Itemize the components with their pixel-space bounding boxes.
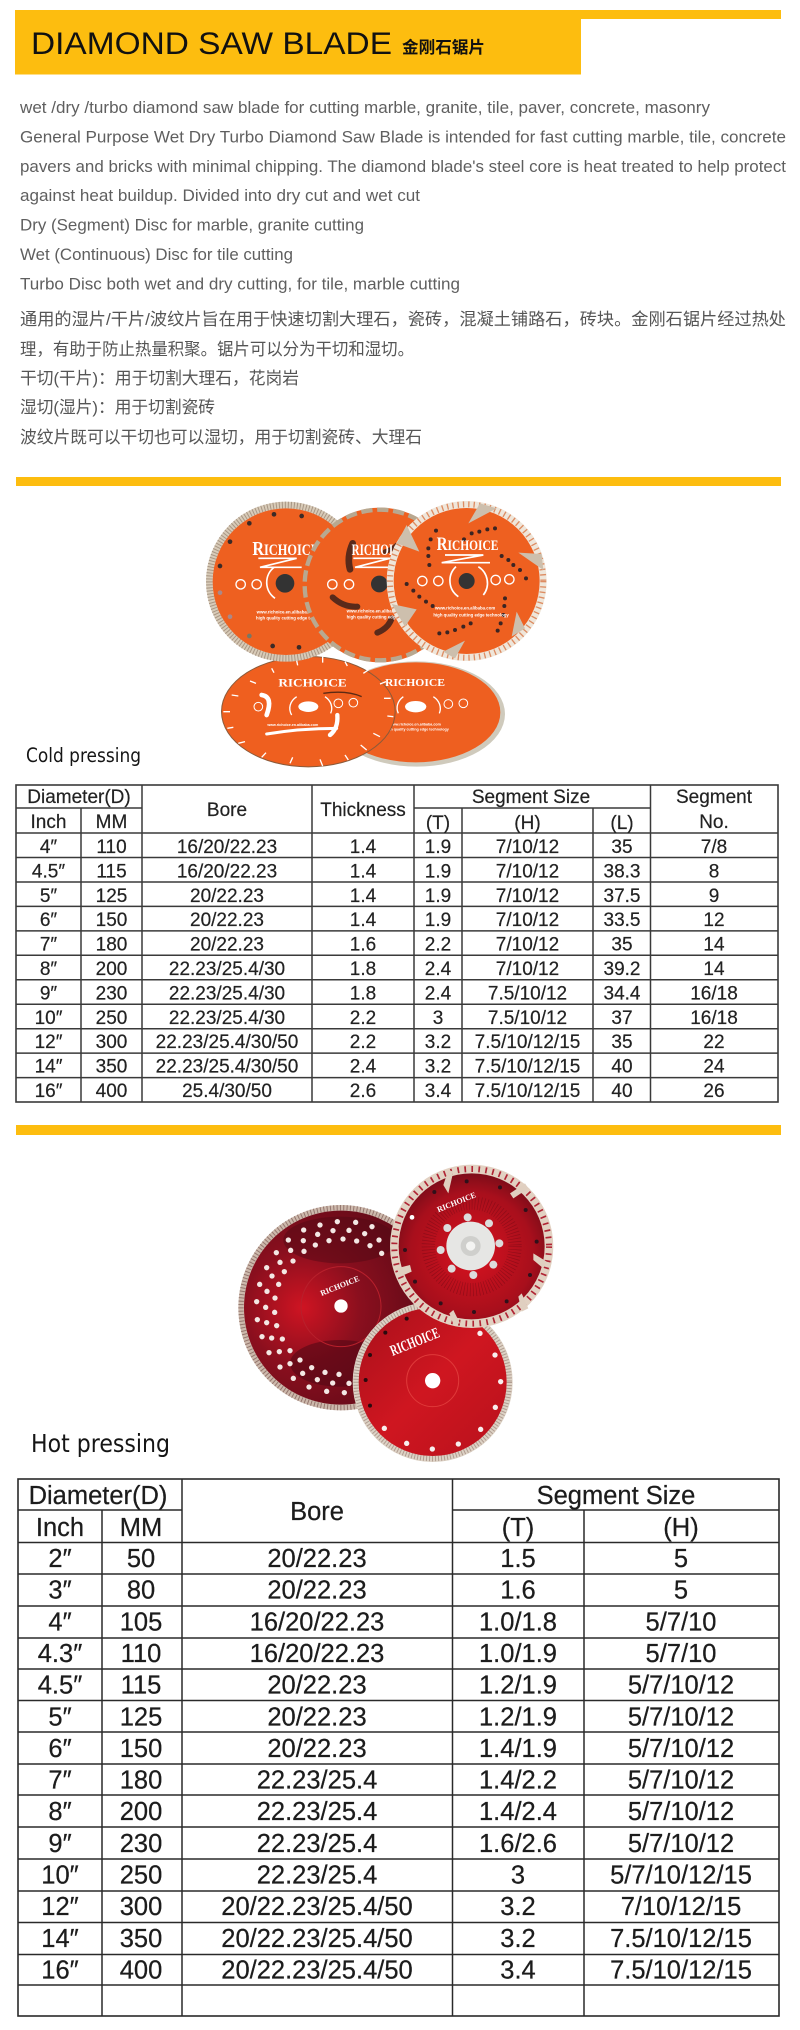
table rows: 12″: [35, 1032, 63, 1053]
table rows: 1.0/1.8: [479, 1608, 557, 1636]
Chinese description: 干切(干片)：用于切割大理石，花岗岩: [20, 369, 299, 388]
table header: Diameter(D): [29, 1482, 167, 1510]
table: cold pressing specifications: [16, 785, 778, 1102]
table rows: 3.2: [425, 1057, 451, 1078]
table rows: 16″: [41, 1956, 79, 1984]
table rows: 3.2: [425, 1032, 451, 1053]
blade: large dark turbo with dots: RICHOICE: [319, 1274, 361, 1298]
table: hot pressing specifications: [18, 1479, 779, 2016]
table rows: 2″: [48, 1545, 72, 1573]
table rows: 9″: [40, 983, 57, 1004]
blade: segmented middle: www.richoice.en.alibaba.com: [346, 609, 407, 614]
table rows: 7.5/10/12/15: [475, 1081, 580, 1102]
blade: turbo left: www.richoice.en.alibaba.com: [256, 609, 317, 614]
table rows: 7/8: [701, 837, 727, 858]
title: DIAMOND SAW BLADE: [31, 25, 392, 61]
table rows: 24: [703, 1057, 725, 1078]
blade: turbo right with dotted pattern: www.richoice.en.alibaba.com: [434, 605, 495, 610]
product photo: orange cold pressed blades: [206, 501, 547, 767]
header banner: [15, 10, 781, 74]
table rows: 400: [96, 1081, 127, 1102]
table rows: 1.6: [500, 1577, 536, 1605]
table rows: 16/18: [690, 983, 738, 1004]
table rows: 125: [96, 886, 127, 907]
blade: top right with flange hub: [390, 1165, 553, 1328]
table rows: 1.8: [350, 959, 376, 980]
table header: Segment Size: [472, 787, 590, 808]
table header: MM: [96, 812, 127, 833]
table rows: 5: [674, 1577, 688, 1605]
table rows: 37.5: [604, 886, 640, 907]
table rows: 20/22.23: [190, 886, 264, 907]
divider bar 2: [16, 1125, 781, 1135]
table rows: 110: [96, 837, 127, 858]
table rows: 20/22.23/25.4/50: [221, 1956, 413, 1984]
table rows: 1.9: [425, 837, 451, 858]
table rows: 115: [96, 861, 127, 882]
table header: Diameter(D): [27, 787, 131, 808]
table rows: 80: [127, 1577, 155, 1605]
table rows: 7″: [40, 935, 57, 956]
table header: [27, 787, 753, 834]
table rows: 250: [120, 1862, 162, 1890]
table rows: 22.23/25.4: [257, 1862, 377, 1890]
table header: Inch: [31, 812, 66, 833]
blade: lower left segmented: www.richoice.en.alibaba.com: [266, 723, 319, 727]
blade: turbo left: RICHOICE: [252, 538, 319, 560]
table rows: 20/22.23: [267, 1577, 367, 1605]
table rows: 3: [511, 1862, 525, 1890]
table rows: 38.3: [604, 861, 640, 882]
blade: turbo right with dotted pattern: RICHOICE: [437, 534, 499, 555]
table rows: 7/10/12: [496, 910, 559, 931]
table header: (T): [426, 813, 450, 834]
table header: Bore: [290, 1498, 344, 1526]
table header: (H): [663, 1514, 699, 1542]
table rows: 5/7/10/12: [628, 1703, 734, 1731]
table rows: 20/22.23: [190, 910, 264, 931]
table rows: 2.4: [350, 1057, 377, 1078]
table header: No.: [699, 812, 729, 833]
table rows: 230: [120, 1830, 162, 1858]
blade: turbo left: [206, 502, 366, 662]
English description: Dry (Segment) Disc for marble, granite cutting: [20, 216, 364, 234]
Chinese description: 通用的湿片/干片/波纹片旨在用于快速切割大理石，瓷砖，混凝土铺路石，砖块。金刚石锯片经过热处: [20, 310, 786, 329]
table rows: 12″: [41, 1893, 79, 1921]
table rows: 22.23/25.4/30: [169, 959, 285, 980]
table header: (H): [514, 813, 541, 834]
table rows: 1.4: [350, 910, 377, 931]
table rows: 10″: [41, 1862, 79, 1890]
table rows: 50: [127, 1545, 155, 1573]
table rows: 9: [709, 886, 719, 907]
table rows: 1.9: [425, 886, 451, 907]
table rows: 7.5/10/12/15: [475, 1057, 580, 1078]
table rows: 14″: [35, 1057, 63, 1078]
table rows: 1.4/2.4: [479, 1798, 557, 1826]
table rows: 3.4: [500, 1956, 536, 1984]
table rows: 16/18: [690, 1008, 738, 1029]
table rows: 39.2: [604, 959, 640, 980]
table rows: 8″: [40, 959, 57, 980]
table rows: 4.3″: [38, 1640, 82, 1668]
table rows: 5/7/10/12: [628, 1798, 734, 1826]
table rows: 4.5″: [38, 1672, 82, 1700]
table rows: 35: [611, 935, 633, 956]
table rows: 7.5/10/12/15: [610, 1956, 752, 1984]
table rows: 4″: [48, 1608, 72, 1636]
table rows: 5/7/10/12: [628, 1735, 734, 1763]
English description: Wet (Continuous) Disc for tile cutting: [20, 246, 293, 264]
table rows: 150: [120, 1735, 162, 1763]
product photo: red hot pressed blades: [238, 1165, 553, 1462]
table rows: 5/7/10: [646, 1640, 716, 1668]
table rows: 1.0/1.9: [479, 1640, 557, 1668]
blade: lower right continuous rim: RICHOICE: [385, 678, 445, 689]
table rows: 4″: [40, 837, 57, 858]
table rows: 7″: [48, 1767, 72, 1795]
table rows: 3: [433, 1008, 443, 1029]
table rows: 1.9: [425, 910, 451, 931]
table rows: 16/20/22.23: [177, 861, 277, 882]
Chinese description: 湿切(湿片)：用于切割瓷砖: [20, 398, 215, 417]
table rows: 40: [611, 1081, 633, 1102]
table rows: 180: [120, 1767, 162, 1795]
table header: MM: [120, 1514, 162, 1542]
table rows: 16″: [35, 1081, 63, 1102]
table rows: 1.4/1.9: [479, 1735, 557, 1763]
table rows: 2.4: [425, 983, 452, 1004]
table rows: 3.4: [425, 1081, 452, 1102]
table rows: 6″: [40, 910, 57, 931]
table rows: 33.5: [604, 910, 640, 931]
table rows: 150: [96, 910, 127, 931]
table rows: [38, 1545, 752, 1984]
table rows: 7/10/12/15: [621, 1893, 741, 1921]
table rows: 105: [120, 1608, 162, 1636]
blade: lower right continuous rim: [328, 661, 505, 767]
table rows: 115: [121, 1672, 161, 1700]
table header: Bore: [207, 800, 247, 821]
table rows: 1.2/1.9: [479, 1703, 557, 1731]
table rows: 4.5″: [32, 861, 65, 882]
table rows: 250: [96, 1008, 127, 1029]
table rows: 3.2: [500, 1925, 536, 1953]
table rows: 40: [611, 1057, 633, 1078]
blade: segmented middle: RICHOICE: [352, 542, 408, 559]
table header: [29, 1482, 699, 1542]
title in Chinese: 金刚石锯片: [402, 37, 485, 57]
blade: turbo right with dotted pattern: [387, 501, 547, 661]
table rows: 1.6: [350, 935, 376, 956]
table rows: 300: [96, 1032, 127, 1053]
table rows: 14″: [41, 1925, 79, 1953]
table rows: 25.4/30/50: [182, 1081, 272, 1102]
blade: bottom bright red: [353, 1302, 513, 1462]
table rows: 3″: [48, 1577, 72, 1605]
English description: General Purpose Wet Dry Turbo Diamond Saw Blade is intended for fast cutting marble, tile, concrete: [20, 128, 786, 146]
table rows: 125: [120, 1703, 162, 1731]
table rows: 9″: [48, 1830, 72, 1858]
table rows: 230: [96, 983, 127, 1004]
table rows: 22: [703, 1032, 725, 1053]
table header: Thickness: [320, 800, 406, 821]
table rows: 22.23/25.4/30/50: [156, 1057, 298, 1078]
table rows: 180: [96, 935, 127, 956]
blade: segmented middle: high quality cutting edge: [347, 615, 398, 620]
Chinese description: 理，有助于防止热量积聚。锯片可以分为干切和湿切。: [20, 340, 414, 359]
table rows: 14: [703, 935, 725, 956]
table rows: 7/10/12: [496, 935, 559, 956]
table rows: 8″: [48, 1798, 72, 1826]
table rows: 16/20/22.23: [250, 1608, 384, 1636]
table rows: 1.4/2.2: [479, 1767, 557, 1795]
table header: Segment: [676, 787, 753, 808]
table rows: 5: [674, 1545, 688, 1573]
table rows: 7/10/12: [496, 837, 559, 858]
English description: Turbo Disc both wet and dry cutting, for tile, marble cutting: [20, 276, 460, 294]
table rows: 110: [121, 1640, 161, 1668]
English description: [19, 99, 786, 294]
blade: turbo right with dotted pattern: high quality cutting edge technology: [433, 613, 509, 618]
table rows: 10″: [35, 1008, 63, 1029]
table rows: 14: [703, 959, 725, 980]
label: Hot pressing: Hot pressing: [31, 1429, 170, 1458]
table rows: 2.4: [425, 959, 452, 980]
table rows: 7/10/12: [496, 861, 559, 882]
table rows: 12: [703, 910, 725, 931]
table rows: 350: [120, 1925, 162, 1953]
table rows: 34.4: [604, 983, 641, 1004]
table rows: 22.23/25.4/30: [169, 1008, 285, 1029]
table rows: [32, 837, 738, 1102]
English description: pavers and bricks with minimal chipping. The diamond blade's steel core is heat treated to help protect: [20, 158, 786, 176]
table rows: 22.23/25.4/30/50: [156, 1032, 298, 1053]
table rows: 35: [611, 1032, 633, 1053]
table rows: 1.4: [350, 837, 377, 858]
blade: top right with flange hub: RICHOICE: [436, 1190, 477, 1214]
table rows: 22.23/25.4: [257, 1798, 377, 1826]
blade: turbo left: high quality cutting edge technology: [256, 615, 332, 620]
table rows: 1.9: [425, 861, 451, 882]
table rows: 400: [120, 1956, 162, 1984]
table header: Segment Size: [537, 1482, 695, 1510]
table rows: 20/22.23: [190, 935, 264, 956]
label: Cold pressing: Cold pressing: [26, 744, 141, 767]
table rows: 2.2: [425, 935, 451, 956]
table rows: 6″: [48, 1735, 72, 1763]
table rows: 7.5/10/12: [488, 983, 567, 1004]
table rows: 16/20/22.23: [250, 1640, 384, 1668]
table rows: 7.5/10/12/15: [475, 1032, 580, 1053]
table rows: 20/22.23: [267, 1703, 367, 1731]
table rows: 1.6/2.6: [479, 1830, 557, 1858]
table rows: 350: [96, 1057, 127, 1078]
table rows: 2.2: [350, 1032, 376, 1053]
table rows: 22.23/25.4: [257, 1767, 377, 1795]
blade: lower right continuous rim: high quality cutting edge technology: [385, 728, 450, 732]
English description: against heat buildup. Divided into dry cut and wet cut: [20, 187, 420, 205]
blade: lower left segmented: RICHOICE: [278, 678, 347, 690]
blade: lower left segmented: [221, 656, 396, 767]
English description: wet /dry /turbo diamond saw blade for cutting marble, granite, tile, paver, concrete, masonry: [19, 99, 711, 117]
table rows: 20/22.23/25.4/50: [221, 1925, 413, 1953]
table rows: 20/22.23: [267, 1672, 367, 1700]
table rows: 7/10/12: [496, 959, 559, 980]
table rows: 20/22.23: [267, 1735, 367, 1763]
table rows: 3.2: [500, 1893, 536, 1921]
table rows: 7/10/12: [496, 886, 559, 907]
blade: segmented middle: [303, 508, 457, 662]
table rows: 26: [703, 1081, 725, 1102]
table rows: 22.23/25.4/30: [169, 983, 285, 1004]
table rows: 1.4: [350, 861, 377, 882]
table rows: 1.5: [500, 1545, 536, 1573]
table rows: 5″: [48, 1703, 72, 1731]
table rows: 1.8: [350, 983, 376, 1004]
table rows: 20/22.23/25.4/50: [221, 1893, 413, 1921]
blade: bottom bright red: RICHOICE: [388, 1325, 442, 1360]
table rows: 1.4: [350, 886, 377, 907]
table rows: 16/20/22.23: [177, 837, 277, 858]
Chinese description: 波纹片既可以干切也可以湿切，用于切割瓷砖、大理石: [20, 428, 422, 447]
table rows: 7.5/10/12/15: [610, 1925, 752, 1953]
table rows: 8: [709, 861, 719, 882]
table rows: 2.6: [350, 1081, 376, 1102]
table header: (L): [610, 813, 634, 834]
table rows: 200: [120, 1798, 162, 1826]
table rows: 37: [611, 1008, 633, 1029]
blade: large dark turbo with dots: [238, 1205, 444, 1410]
table rows: 200: [96, 959, 127, 980]
blade: lower right continuous rim: www.richoice.en.alibaba.com: [389, 723, 442, 727]
table rows: 5″: [40, 886, 57, 907]
table header: Inch: [36, 1514, 84, 1542]
table rows: 5/7/10: [646, 1608, 716, 1636]
table rows: 22.23/25.4: [257, 1830, 377, 1858]
table rows: 35: [611, 837, 633, 858]
table rows: 7.5/10/12: [488, 1008, 567, 1029]
table rows: 5/7/10/12: [628, 1767, 734, 1795]
table rows: 5/7/10/12: [628, 1672, 734, 1700]
table rows: 2.2: [350, 1008, 376, 1029]
table rows: 300: [120, 1893, 162, 1921]
table header: (T): [502, 1514, 534, 1542]
table rows: 1.2/1.9: [479, 1672, 557, 1700]
table rows: 5/7/10/12/15: [610, 1862, 752, 1890]
table rows: 20/22.23: [267, 1545, 367, 1573]
divider bar 1: [16, 477, 781, 486]
table rows: 5/7/10/12: [628, 1830, 734, 1858]
Chinese description: [20, 310, 786, 447]
